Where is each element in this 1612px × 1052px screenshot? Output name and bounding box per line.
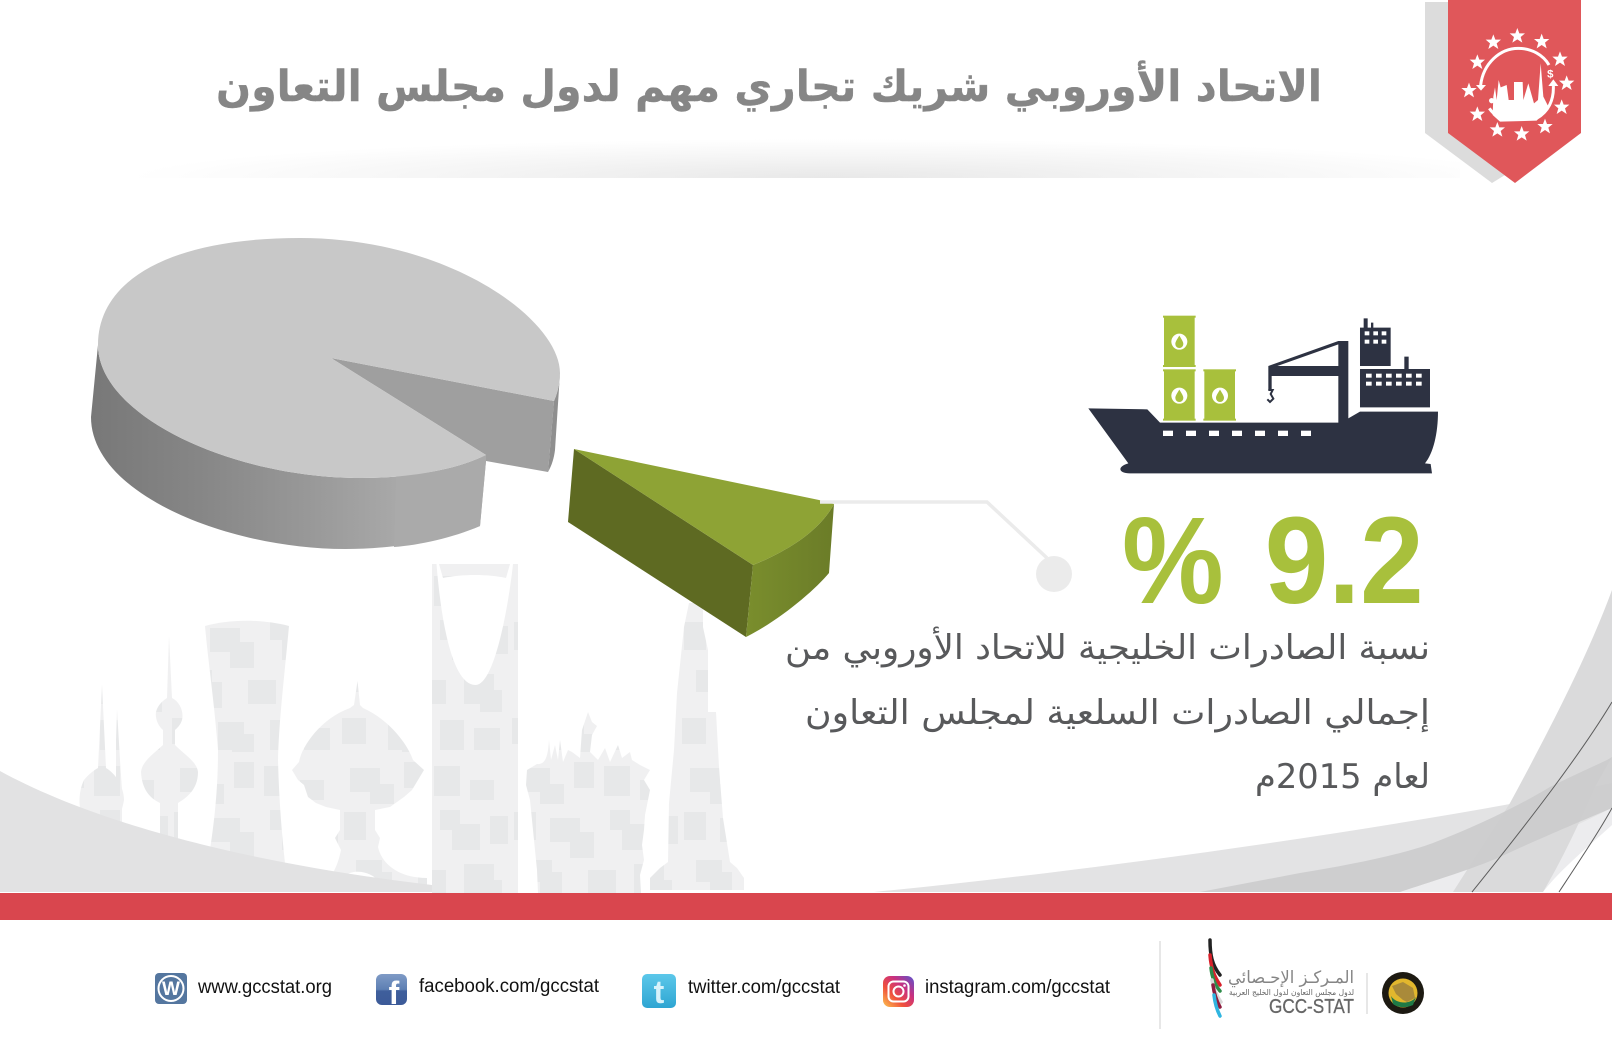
footer divider [1159,941,1161,1029]
right swoosh curves [874,590,1612,892]
facebook link: facebook.com/gccstat [419,976,600,997]
big percentage: % 9.2 [1122,492,1424,630]
description text: لعام 2015م [1255,757,1430,797]
website link: W [162,979,180,1000]
gcc-stat logo: المـركـز الإحـصائي [1228,968,1354,988]
twitter link: t [654,974,665,1010]
ribbon badge [1425,0,1581,183]
left ground curve [0,771,489,892]
instagram link: instagram.com/gccstat [925,977,1111,998]
hull [1088,341,1438,473]
description text: إجمالي الصادرات السلعية لمجلس التعاون [805,693,1430,733]
pie chart [91,238,560,549]
instagram link [883,976,1111,1007]
oil barrels [1163,316,1236,421]
green pie slice [568,449,834,637]
website link [155,973,332,1004]
twitter link: twitter.com/gccstat [688,977,841,998]
website link: www.gccstat.org [197,977,332,998]
red footer bar [0,893,1612,920]
twitter link [642,974,841,1010]
ship icon [1088,316,1438,473]
skyline [80,603,744,893]
title shadow [60,100,1460,178]
ribbon badge: $ [1547,69,1554,81]
connector line [820,502,1072,592]
gcc-stat logo: GCC-STAT [1269,996,1354,1018]
description text [785,626,1430,797]
kingdom tower [432,564,518,893]
gcc-stat logo: لدول مجلس التعاون لدول الخليج العربية [1229,988,1354,997]
pie top face [98,238,560,478]
description text: نسبة الصادرات الخليجية للاتحاد الأوروبي من [785,626,1430,668]
logo ribbon strokes [1210,940,1221,1016]
facebook link: f [389,975,400,1011]
title: الاتحاد الأوروبي شريك تجاري مهم لدول مجلس التعاون [216,60,1322,112]
pie side wall [91,345,486,549]
gcc-stat logo [1210,940,1367,1018]
gcc emblem [1382,972,1424,1014]
facebook link [376,974,600,1011]
